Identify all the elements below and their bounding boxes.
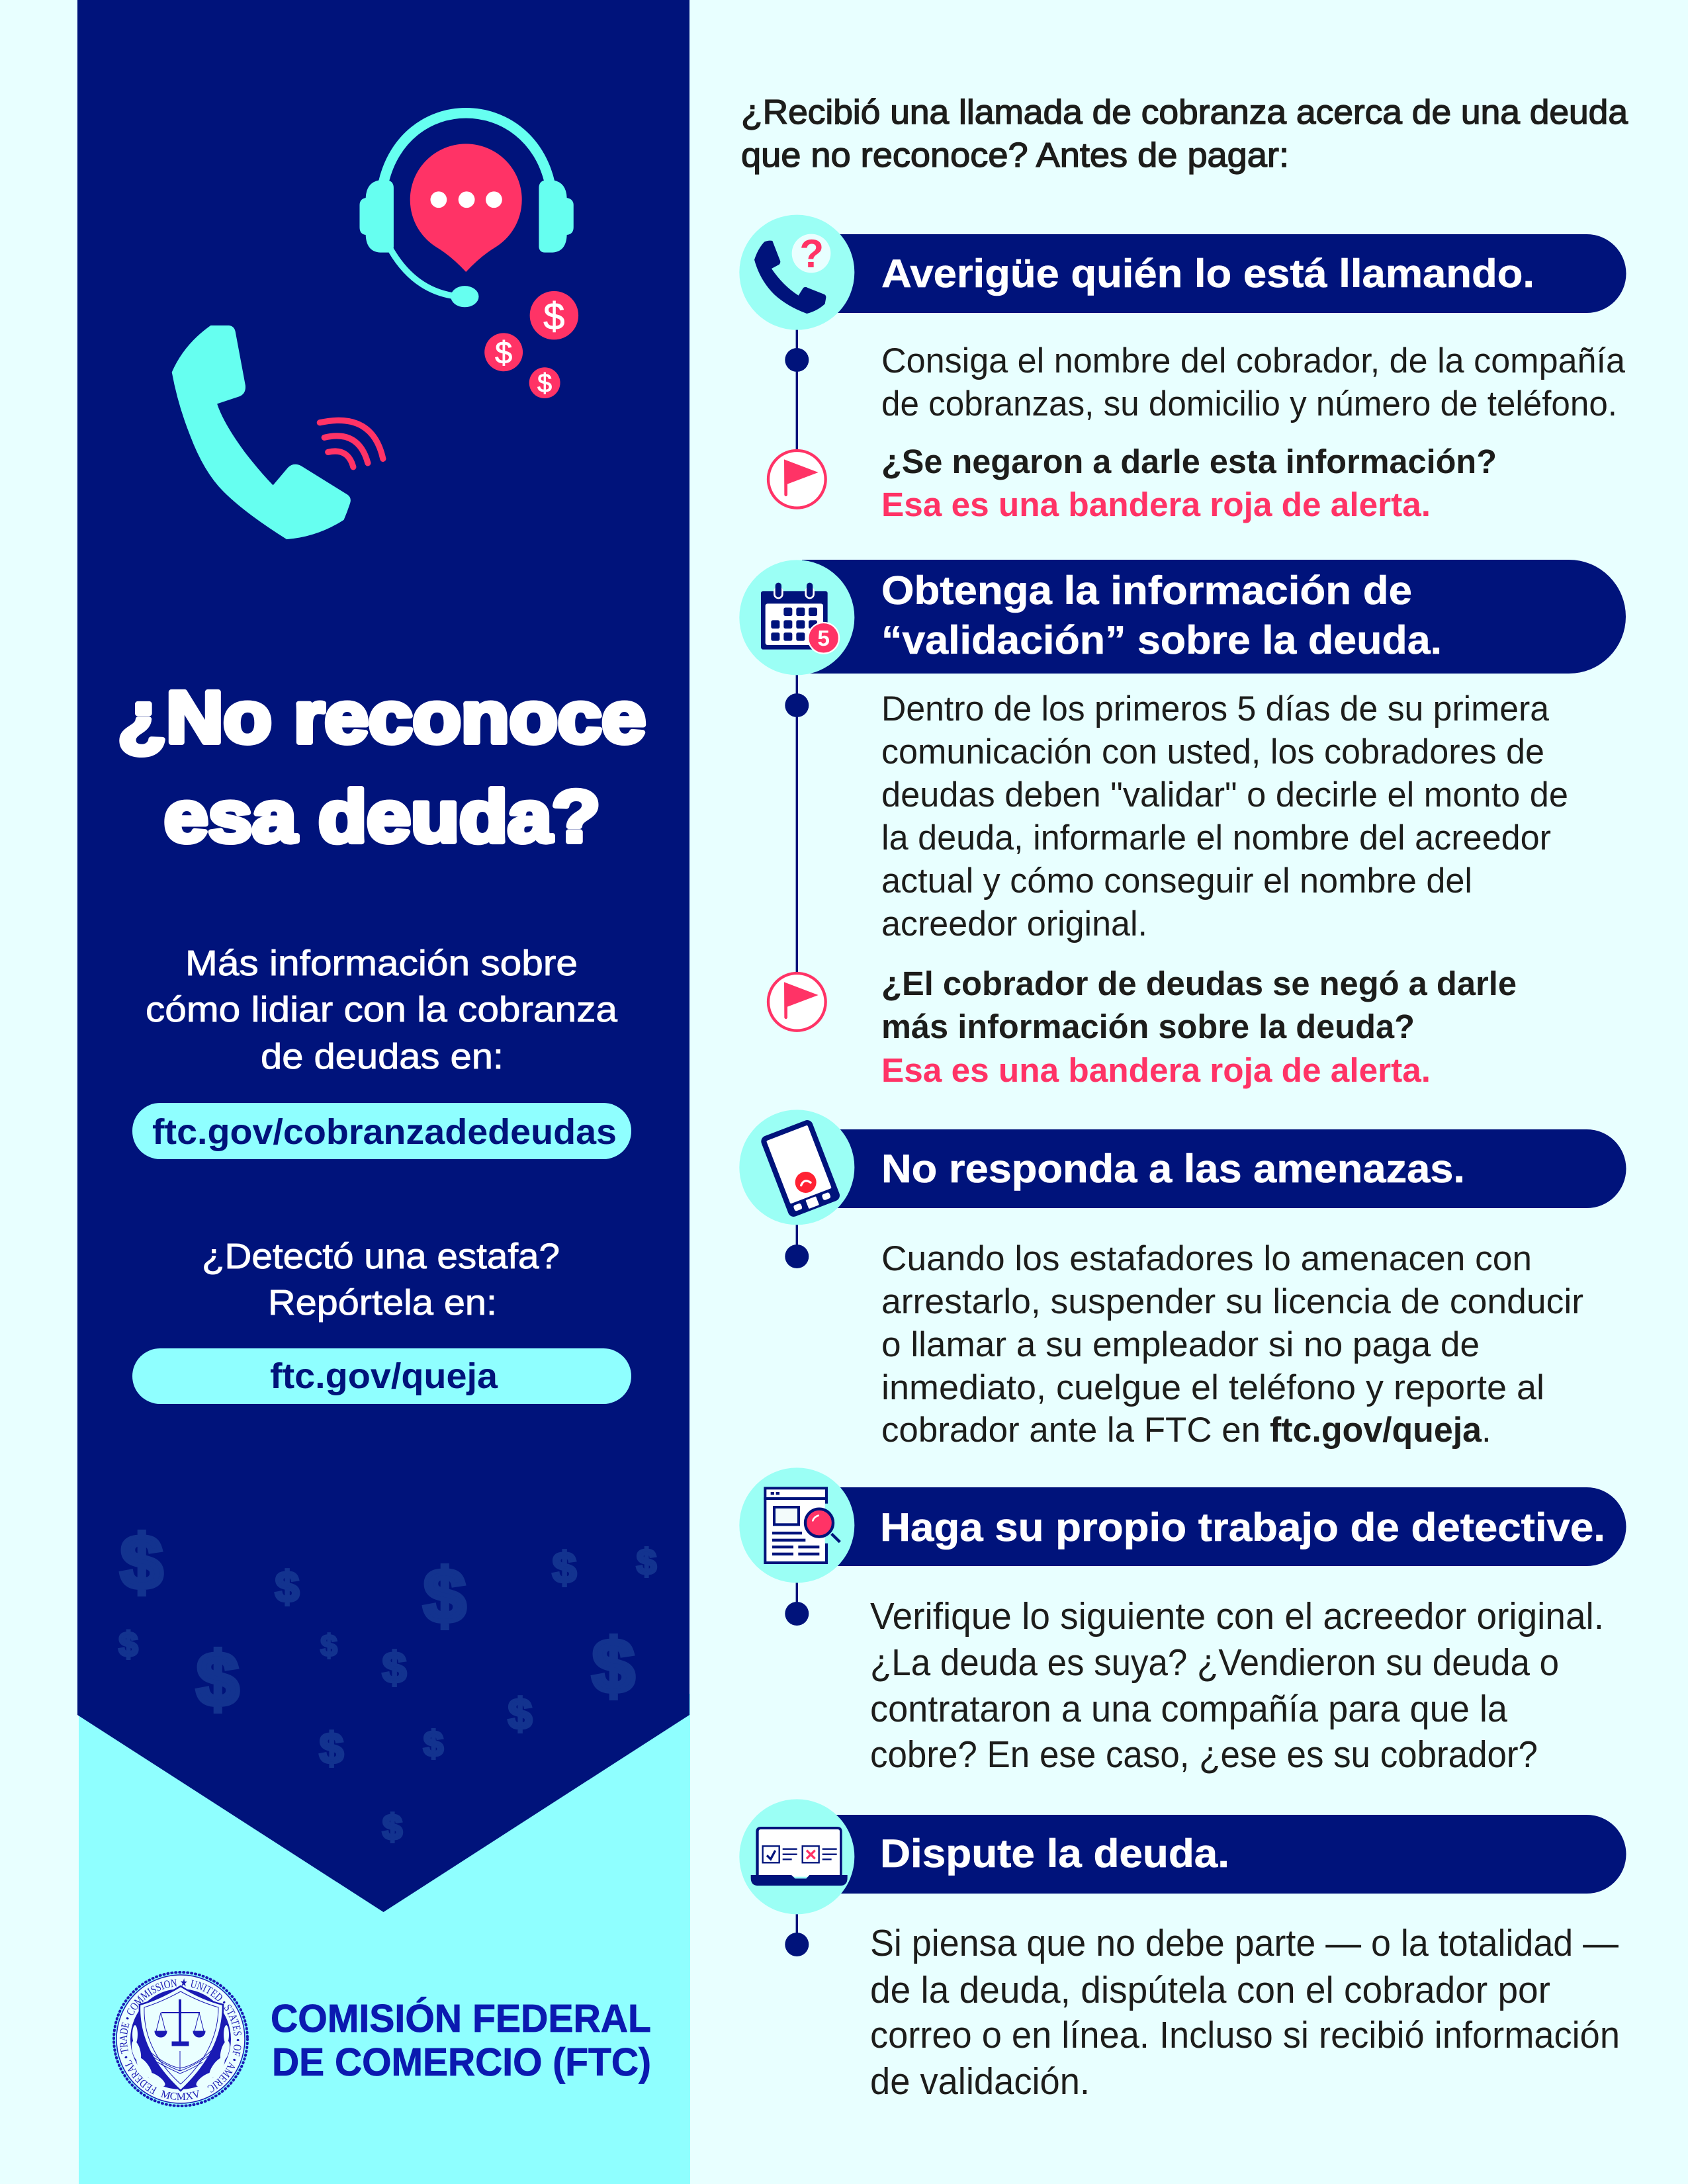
panel: left sidebar [77,0,690,2184]
title [118,677,646,857]
body text [870,1595,1604,1776]
body text [881,1239,1583,1450]
body text: arrestarlo, suspender su licencia de conducir [881,1282,1583,1321]
icon: smartphone [739,1110,854,1225]
heading text [881,568,1442,662]
text block: report a scam: ¿Detectó una estafa? [202,1237,560,1276]
panel: step 1 [739,215,1626,523]
body text: de la deuda, dispútela con el cobrador por [870,1969,1550,2011]
body text: cobrador ante la FTC en [881,1411,1261,1450]
background dollar signs: $ [637,1542,656,1582]
icon: dollar coins: $ [495,335,512,370]
icon: phone with question mark: ? [799,232,824,276]
heading text: Haga su propio trabajo de detective. [880,1505,1605,1550]
icon: red flag [768,451,826,508]
logo text: Comisión Federal de Comercio [271,1997,651,2084]
link pill: ftc.gov/cobranzadedeudas [132,1103,631,1159]
icon: dollar coins: $ [543,295,564,337]
bullet dot [785,348,809,372]
background dollar signs: $ [119,1626,138,1664]
bullet dot [785,1245,809,1268]
title: esa deuda? [164,776,600,857]
red flag warning: Esa es una bandera roja de alerta. [881,486,1431,523]
heading bar [802,1487,1626,1566]
background dollar signs: $ [197,1638,239,1722]
panel: step 4 [739,1467,1626,1776]
icon: laptop checklist [739,1799,854,1914]
body text: inmediato, cuelgue el teléfono y reporte al [881,1368,1544,1407]
heading bar [802,234,1626,313]
text block: more information [146,943,618,1076]
bullet dot [785,1933,809,1956]
background dollar signs: $ [423,1724,443,1764]
body text [870,1922,1620,2103]
logo text: Comisión Federal de Comercio: DE COMERCIO (FTC) [272,2040,651,2084]
body text: actual y cómo conseguir el nombre del [881,861,1472,900]
red flag warning: más información sobre la deuda? [881,1008,1415,1045]
timeline connector [796,1914,798,1945]
text block: report a scam: Repórtela en: [268,1283,497,1323]
icon: document with magnifier [739,1467,854,1583]
panel: step 5 [739,1799,1626,2103]
body text [881,689,1568,943]
body text: acreedor original. [881,904,1147,943]
background dollar signs: $ [320,1724,343,1772]
body text: comunicación con usted, los cobradores de [881,732,1544,771]
red flag warning [881,443,1497,523]
background dollar signs: $ [592,1624,635,1709]
body text: Verifique lo siguiente con el acreedor original. [870,1595,1604,1638]
intro text: que no reconoce? Antes de pagar: [741,136,1289,175]
heading text: “validación” sobre la deuda. [881,618,1442,662]
body text: ftc.gov/queja [1270,1411,1482,1450]
red flag warning: ¿Se negaron a darle esta información? [881,443,1497,480]
background dollar signs: $ [320,1628,337,1663]
red flag warning: ¿El cobrador de deudas se negó a darle [881,965,1517,1002]
link pill: ftc.gov/cobranzadedeudas: ftc.gov/cobranzadedeudas [152,1112,617,1152]
link pill: ftc.gov/queja [132,1348,631,1404]
text block: report a scam [202,1237,560,1323]
panel: step 2 [739,560,1626,1089]
background dollar signs: $ [423,1554,466,1639]
body text: Si piensa que no debe parte — o la totalidad — [870,1922,1619,1964]
icon: calendar: 5 [817,627,830,651]
heading text: Averigüe quién lo está llamando. [881,251,1534,296]
body text: ¿La deuda es suya? ¿Vendieron su deuda o [870,1641,1559,1684]
icon: dollar coins: $ [537,369,552,398]
body text: . [1482,1411,1491,1450]
background dollar signs: $ [382,1643,406,1692]
heading text: Dispute la deuda. [880,1831,1229,1876]
body text: deudas deben "validar" o decirle el monto de [881,775,1568,814]
icon: phone with question mark [739,215,854,330]
illustration: headset with speech bubble [359,113,574,307]
red flag warning [881,965,1517,1089]
logo text: Comisión Federal de Comercio: COMISIÓN FEDERAL [271,1997,651,2040]
text block: more information: cómo lidiar con la cobranza [146,990,618,1029]
timeline connector [796,1583,798,1614]
body text: o llamar a su empleador si no paga de [881,1325,1480,1364]
background dollar signs: $ [382,1808,402,1847]
panel: step 3 [739,1110,1626,1450]
intro text: ¿Recibió una llamada de cobranza acerca de una deuda [741,93,1628,132]
body text: de cobranzas, su domicilio y número de teléfono. [881,384,1617,423]
illustration: telephone handset with signal waves [172,326,383,539]
body text: correo o en línea. Incluso si recibió información [870,2014,1620,2056]
icon: red flag [768,973,826,1031]
icon: calendar [739,560,854,675]
background dollar signs [119,1520,656,1847]
heading bar [802,1815,1626,1894]
logo: FTC seal [112,1971,249,2107]
heading text: Obtenga la información de [881,568,1412,613]
heading bar [802,1129,1626,1208]
heading bar [802,560,1626,674]
body text: Cuando los estafadores lo amenacen con [881,1239,1532,1278]
timeline connector [796,1224,798,1257]
body text: la deuda, informarle el nombre del acreedor [881,818,1551,857]
text block: more information: de deudas en: [261,1037,504,1076]
background dollar signs: $ [508,1689,532,1738]
timeline connector [796,674,798,978]
red flag warning: Esa es una bandera roja de alerta. [881,1051,1431,1089]
body text: Consiga el nombre del cobrador, de la compañía [881,341,1626,380]
background dollar signs: $ [120,1520,163,1605]
body text: cobre? En ese caso, ¿ese es su cobrador? [870,1733,1538,1776]
background dollar signs: $ [553,1543,576,1592]
body text: de validación. [870,2060,1090,2103]
background dollar signs: $ [275,1562,299,1611]
timeline connector [796,329,798,455]
body text: contrataron a una compañía para que la [870,1688,1507,1730]
body text [881,341,1626,423]
logo: FTC seal: MCMXV [160,2090,199,2100]
body text: Dentro de los primeros 5 días de su primera [881,689,1550,728]
title: ¿No reconoce [118,677,646,758]
bullet dot [785,693,809,717]
link pill: ftc.gov/queja: ftc.gov/queja [270,1356,498,1396]
bullet dot [785,1602,809,1626]
text block: more information: Más información sobre [185,943,578,983]
logo: FTC seal: FEDERAL • TRADE • COMMISSION ★ UNITED • STATES • OF • AMERICA [119,1978,242,2095]
intro text [741,93,1628,175]
heading text: No responda a las amenazas. [881,1147,1465,1191]
icon: dollar coins [484,291,578,398]
